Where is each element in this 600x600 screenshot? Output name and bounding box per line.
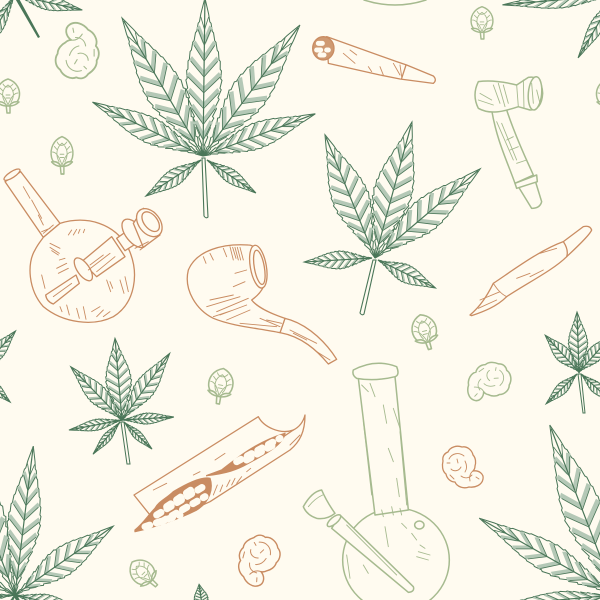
hop bud, top left <box>51 137 73 174</box>
opened rolling paper with tobacco <box>134 415 305 532</box>
green bong, lower right <box>303 363 449 600</box>
green bong base fragment, top edge <box>364 0 426 5</box>
orange nugget, bottom <box>228 529 290 591</box>
cannabis leaf, bottom left <box>0 418 122 600</box>
orange tobacco pipe <box>187 244 337 364</box>
green nugget, top left <box>42 17 111 87</box>
green hammer pipe <box>475 76 543 208</box>
cannabis leaf, bottom right <box>472 418 600 600</box>
hop bud, left edge <box>0 79 20 113</box>
orange nugget, right <box>442 446 483 488</box>
large cannabis leaf, top centre <box>87 0 320 218</box>
hop bud, bottom <box>124 554 164 594</box>
hop bud, right edge <box>596 79 600 113</box>
cannabis leaf fragment, left edge <box>0 326 21 406</box>
cannabis leaf fragment, top left <box>0 0 122 62</box>
cannabis leaf tip, bottom <box>192 583 210 600</box>
green nugget, right <box>465 359 513 406</box>
orange bong <box>3 167 167 322</box>
cannabis leaf, centre right <box>304 117 491 315</box>
hop bud, centre right <box>409 312 441 352</box>
cannabis leaf fragment, top right <box>472 0 600 62</box>
cannabis leaf, lower left <box>64 337 178 464</box>
hop bud, lower centre <box>205 366 235 406</box>
cannabis leaf, right edge <box>539 312 600 413</box>
hop bud, top right <box>471 7 493 39</box>
orange rolled joint, right <box>470 226 592 316</box>
orange rolled joint, top <box>313 37 435 83</box>
